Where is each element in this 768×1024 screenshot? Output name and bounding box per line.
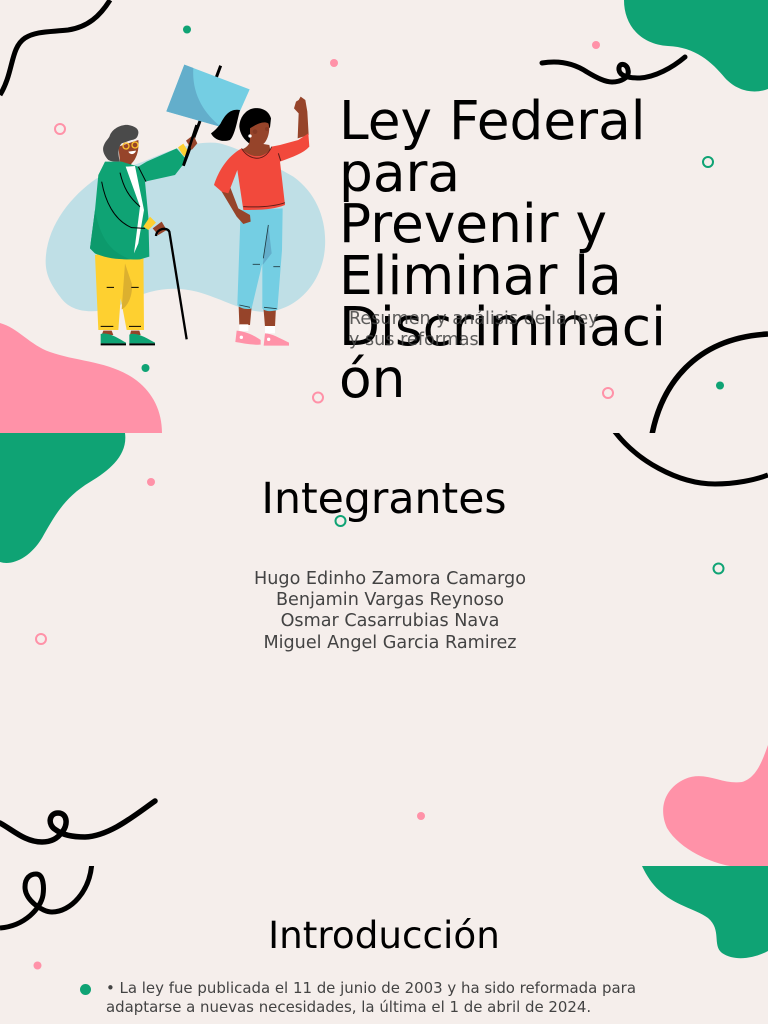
socks xyxy=(239,324,248,331)
team member list: Benjamin Vargas Reynoso xyxy=(276,590,504,610)
title: Discriminaci xyxy=(339,296,666,358)
bent arm xyxy=(222,187,251,224)
yellow cuffs xyxy=(178,144,188,157)
subtitle: y sus reformas xyxy=(349,330,479,350)
cardigan fold lines xyxy=(102,167,146,228)
ponytail and hair xyxy=(211,110,240,141)
subtitle: Resumen y análisis de la ley xyxy=(349,309,599,329)
introduction text: • La ley fue publicada el 11 de junio de 2003 y ha sido reformada para xyxy=(106,979,636,997)
hair xyxy=(103,125,138,162)
title: ón xyxy=(339,348,405,410)
title: Prevenir y xyxy=(339,193,607,255)
bullet icon xyxy=(80,984,91,995)
team member list xyxy=(254,568,526,653)
team member list: Hugo Edinho Zamora Camargo xyxy=(254,568,526,588)
face and neck xyxy=(242,122,271,156)
hands xyxy=(186,135,197,150)
legs xyxy=(239,307,252,325)
title: para xyxy=(339,142,460,204)
woman in red xyxy=(211,97,309,346)
raised arm xyxy=(294,97,309,138)
title: Ley Federal xyxy=(339,90,646,152)
red sweater xyxy=(214,133,309,210)
team member list: Miguel Angel Garcia Ramirez xyxy=(263,633,517,653)
subtitle xyxy=(349,309,599,350)
introduction text: adaptarse a nuevas necesidades, la última el 1 de abril de 2024. xyxy=(106,998,591,1016)
heading: introducción: Introducción xyxy=(268,913,500,957)
sign pole and board xyxy=(183,66,221,166)
title: Eliminar la xyxy=(339,244,622,306)
trousers xyxy=(95,242,144,330)
introduction text xyxy=(106,979,636,1016)
white top xyxy=(126,166,144,253)
woman with cane and sign xyxy=(90,65,250,344)
heading: integrantes: Integrantes xyxy=(261,474,507,524)
neck and face xyxy=(120,160,132,168)
legs and shoes xyxy=(102,331,113,335)
pink shoes xyxy=(235,331,261,345)
team member list: Osmar Casarrubias Nava xyxy=(281,611,499,631)
glasses and smile xyxy=(123,143,129,149)
blue blob xyxy=(46,143,325,312)
title xyxy=(339,90,666,410)
blue jeans xyxy=(237,208,283,311)
green cardigan xyxy=(90,148,187,259)
cane xyxy=(156,229,187,339)
